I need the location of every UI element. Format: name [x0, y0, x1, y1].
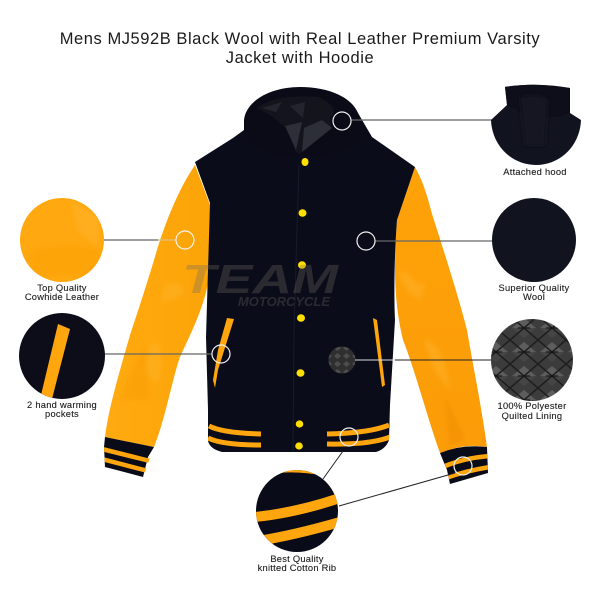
marker circles	[176, 112, 472, 475]
watermark: TEAM	[182, 256, 339, 302]
quilted lining patch	[328, 346, 356, 374]
callout: pockets	[19, 313, 105, 419]
title: Jacket with Hoodie	[226, 49, 374, 67]
callout: quilted lining: Quilted Lining	[502, 411, 562, 421]
callout: attached hood: Attached hood	[503, 167, 567, 177]
callout: pockets: 2 hand warming	[27, 400, 97, 410]
connector lines	[104, 120, 511, 506]
title: Mens MJ592B Black Wool with Real Leather Premium Varsity	[60, 30, 540, 48]
right cuff	[440, 446, 490, 484]
jacket illustration	[102, 87, 490, 484]
placket seam	[293, 165, 299, 452]
hem rib stripes	[208, 425, 390, 445]
callout: leather	[20, 198, 104, 302]
watermark	[182, 256, 339, 309]
right leather sleeve	[395, 167, 487, 453]
left pocket welt	[213, 318, 234, 388]
left cuff	[102, 437, 154, 477]
callout: leather: Cowhide Leather	[25, 292, 99, 302]
snap buttons	[295, 158, 308, 450]
wool body	[195, 130, 415, 452]
callout: attached hood	[491, 85, 581, 177]
right pocket welt	[373, 318, 385, 387]
left leather sleeve	[105, 165, 212, 447]
callout: leather: Top Quality	[37, 283, 87, 293]
callout: wool: Superior Quality	[499, 283, 570, 293]
callout: pockets: pockets	[45, 409, 79, 419]
hood lining	[257, 96, 334, 154]
hood	[244, 87, 372, 156]
title	[60, 30, 540, 67]
callout: rib	[255, 470, 340, 573]
callout: rib: Best Quality	[270, 554, 324, 564]
callout: quilted lining: 100% Polyester	[498, 401, 566, 411]
callout: rib: knitted Cotton Rib	[258, 563, 336, 573]
watermark: MOTORCYCLE	[238, 295, 331, 309]
callout: quilted lining	[491, 319, 573, 421]
callout: wool	[492, 198, 576, 302]
callout: wool: Wool	[523, 292, 545, 302]
